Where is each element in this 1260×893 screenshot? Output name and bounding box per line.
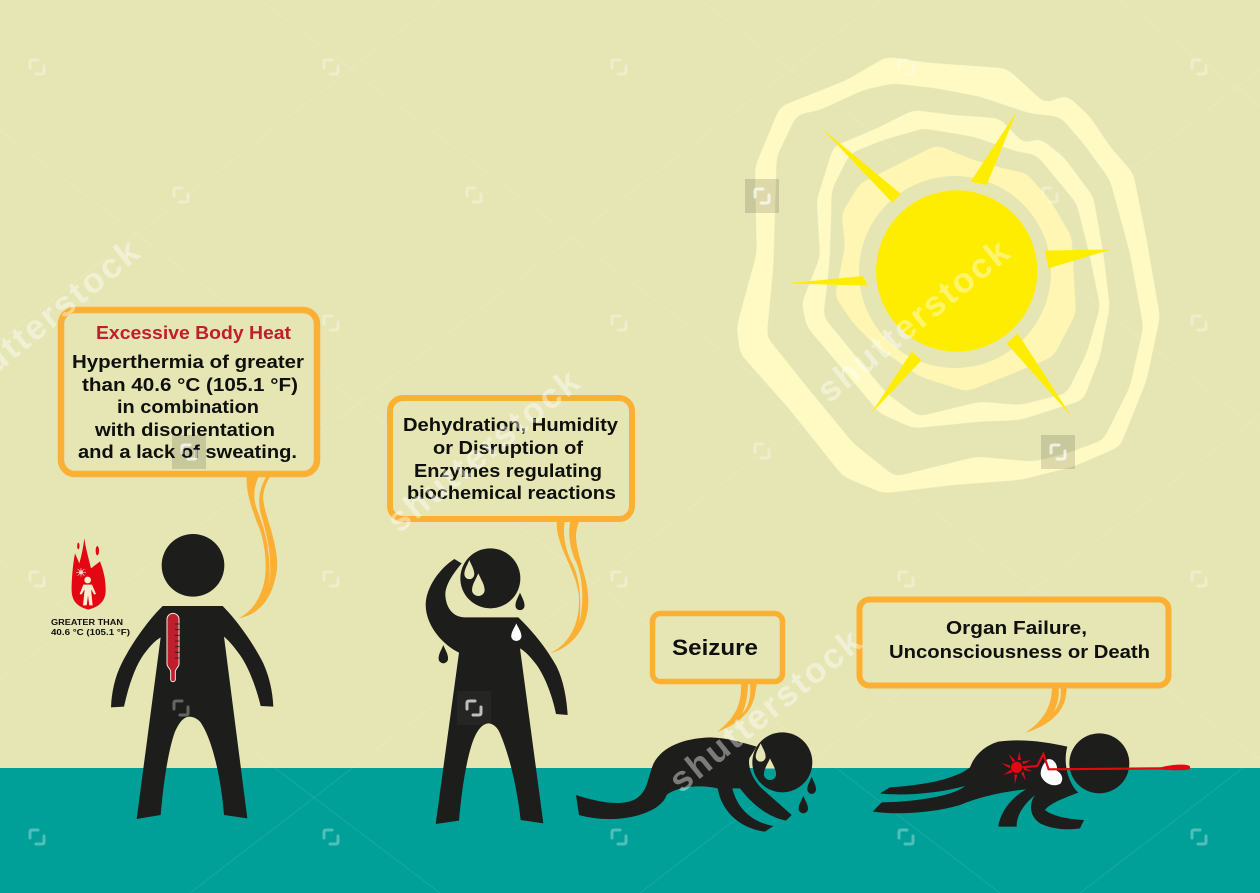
bubble text bbox=[72, 351, 304, 462]
bubble text: or Disruption of bbox=[433, 437, 584, 458]
watermarks: shutterstock bbox=[661, 622, 869, 800]
speech bubble: dehydration bbox=[390, 398, 632, 653]
sweat drops bbox=[756, 743, 816, 813]
bubble text: Organ Failure, bbox=[946, 617, 1087, 638]
head bbox=[1069, 733, 1129, 793]
red pulse line bbox=[1023, 754, 1162, 769]
outer heat ring bbox=[737, 57, 1160, 493]
bubble text: Enzymes regulating bbox=[414, 460, 602, 481]
bubble text bbox=[889, 617, 1150, 662]
body bbox=[873, 740, 1084, 829]
speech bubble: excessive body heat bbox=[61, 310, 317, 618]
bubble tail bbox=[717, 682, 757, 732]
bubble text: in combination bbox=[117, 396, 259, 417]
bubble text: with disorientation bbox=[94, 419, 275, 440]
bubble heading: Excessive Body Heat bbox=[96, 323, 291, 343]
bubble text: Seizure bbox=[672, 635, 758, 660]
icon: flame with person bbox=[72, 538, 106, 610]
flame caption bbox=[51, 617, 130, 637]
bubble text: Unconsciousness or Death bbox=[889, 641, 1150, 662]
bubble tail bbox=[238, 472, 277, 618]
sun rays bbox=[786, 112, 1112, 417]
body bbox=[576, 737, 792, 832]
bubble frame bbox=[652, 614, 782, 682]
bubble frame bbox=[860, 600, 1168, 686]
bubble text bbox=[403, 414, 619, 503]
bubble text: Dehydration, Humidity bbox=[403, 414, 619, 435]
figure: collapsed person having seizure bbox=[576, 732, 816, 832]
bubble frame bbox=[390, 398, 632, 519]
inner heat blob bbox=[835, 145, 1076, 392]
head bbox=[162, 534, 224, 597]
bubble tail bbox=[1025, 684, 1067, 733]
bubble text: than 40.6 °C (105.1 °F) bbox=[82, 374, 298, 395]
kidney bbox=[1041, 759, 1062, 785]
thermometer bbox=[167, 613, 179, 682]
organ starburst bbox=[1001, 751, 1033, 784]
head bbox=[460, 548, 520, 608]
figure: standing person with thermometer bbox=[111, 534, 273, 819]
flame caption: GREATER THAN bbox=[51, 617, 123, 627]
watermarks: shutterstock bbox=[809, 232, 1017, 410]
bubble frame bbox=[61, 310, 317, 474]
flame caption: 40.6 °C (105.1 °F) bbox=[51, 627, 130, 637]
sun illustration bbox=[737, 57, 1160, 493]
figure: collapsed person with organ failure bbox=[873, 733, 1190, 829]
middle heat ring bbox=[802, 110, 1110, 428]
sun halo gap bbox=[859, 176, 1051, 368]
body bbox=[426, 559, 568, 824]
sun disc bbox=[876, 190, 1037, 352]
bubble tail bbox=[550, 518, 588, 653]
speech bubble: organ failure bbox=[860, 600, 1168, 733]
sun heat waves bbox=[737, 57, 1160, 493]
pulse line tip bbox=[1160, 765, 1190, 770]
bubble text: Hyperthermia of greater bbox=[72, 351, 304, 372]
head bbox=[752, 732, 812, 792]
watermarks: shutterstock bbox=[379, 362, 587, 540]
body bbox=[111, 606, 273, 819]
bubble text: and a lack of sweating. bbox=[78, 441, 297, 462]
speech bubble: seizure bbox=[652, 614, 782, 732]
sweat drops bbox=[439, 560, 525, 663]
ground: teal band bbox=[0, 768, 1260, 893]
figure: person wiping sweat bbox=[426, 548, 568, 824]
bubble text: biochemical reactions bbox=[407, 482, 616, 503]
